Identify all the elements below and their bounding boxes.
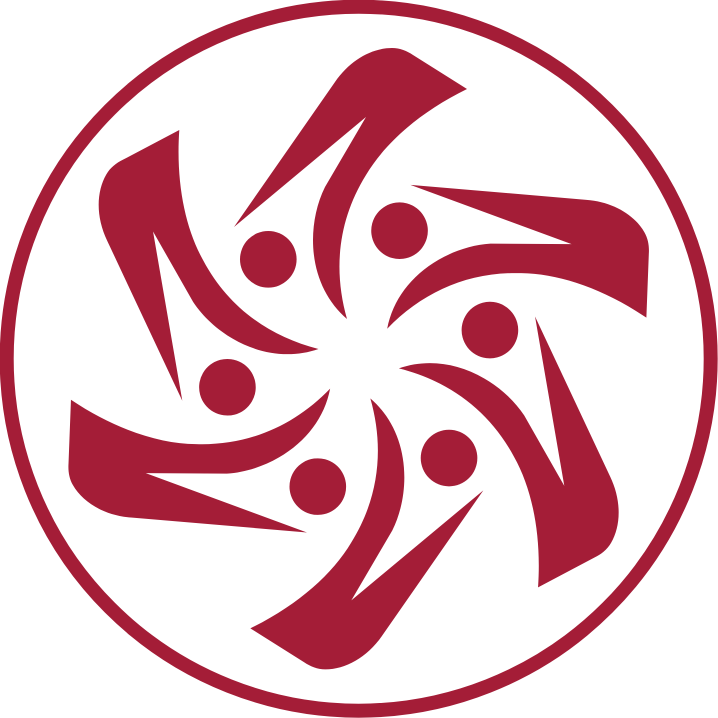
figure: upper left	[27, 110, 378, 447]
figure: top	[234, 48, 467, 319]
figure: right	[331, 95, 682, 433]
figure: lower left	[35, 285, 387, 622]
figure: bottom	[250, 398, 483, 669]
figure: lower right	[339, 271, 690, 608]
